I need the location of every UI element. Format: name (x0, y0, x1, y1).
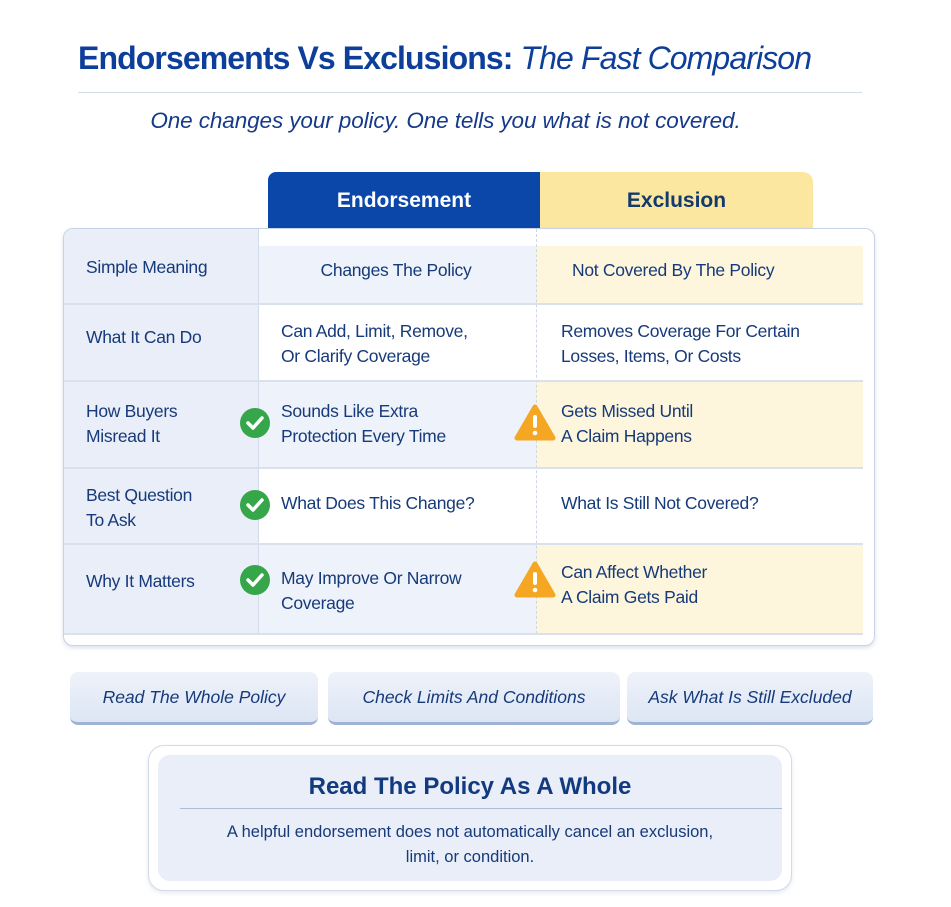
text: Can Affect Whether (561, 562, 707, 582)
subtitle: One changes your policy. One tells you what is not covered. (150, 108, 741, 133)
header: exclusion: Exclusion (627, 188, 726, 212)
row labels: Simple Meaning (86, 257, 207, 277)
text: Coverage (281, 593, 354, 613)
text: Why It Matters (86, 571, 195, 591)
callout body: A helpful endorsement does not automatically cancel an exclusion, (227, 823, 713, 841)
text: How Buyers (86, 401, 177, 421)
icon: check 2 (240, 490, 270, 520)
button: read whole policy: Read The Whole Policy (103, 686, 285, 706)
text: Gets Missed Until (561, 401, 693, 421)
text: Losses, Items, Or Costs (561, 346, 741, 366)
text: What Is Still Not Covered? (561, 493, 758, 513)
text: A Claim Happens (561, 426, 692, 446)
text: Protection Every Time (281, 426, 446, 446)
header: endorsement: Endorsement (337, 188, 471, 212)
button: read whole policy (70, 672, 318, 725)
text: Removes Coverage For Certain (561, 321, 800, 341)
text: A Claim Gets Paid (561, 587, 698, 607)
header: exclusion (540, 172, 813, 229)
comparison table (63, 228, 875, 646)
callout heading: Read The Policy As A Whole (309, 773, 631, 800)
text: Sounds Like Extra (281, 401, 418, 421)
text: Misread It (86, 426, 160, 446)
icon: warning 1 (514, 404, 556, 440)
text: What Does This Change? (281, 493, 474, 513)
icon: check 1 (240, 408, 270, 438)
callout body (227, 823, 713, 866)
text: Best Question (86, 485, 192, 505)
text: Can Add, Limit, Remove, (281, 321, 468, 341)
text: Or Clarify Coverage (281, 346, 430, 366)
button: check limits (328, 672, 620, 725)
button: ask excluded: Ask What Is Still Excluded (648, 686, 852, 706)
text: May Improve Or Narrow (281, 568, 461, 588)
header: endorsement (268, 172, 540, 229)
icon: warning 2 (514, 562, 556, 598)
text: What It Can Do (86, 327, 201, 347)
icon: check 3 (240, 565, 270, 595)
exclusion cells: Not Covered By The Policy (572, 260, 774, 280)
text: To Ask (86, 510, 136, 530)
callout body: limit, or condition. (406, 848, 534, 866)
button: ask excluded (627, 672, 873, 725)
callout: read policy as whole (148, 745, 792, 891)
endorsement cells: Changes The Policy (321, 260, 471, 280)
button: check limits: Check Limits And Conditions (362, 686, 586, 706)
title: Endorsements Vs Exclusions: The Fast Comparison (78, 40, 811, 76)
